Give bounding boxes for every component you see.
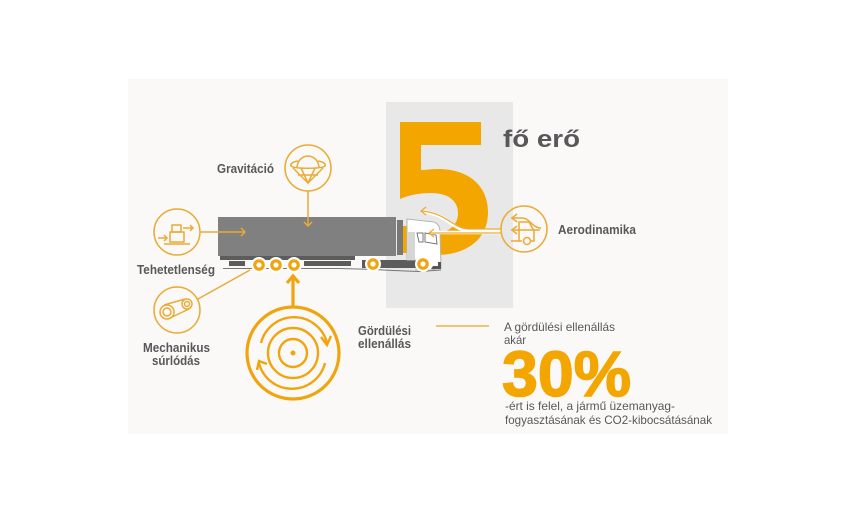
cab windows xyxy=(417,233,437,244)
arrow: gravity xyxy=(304,191,312,226)
label: Tehetetlenség: Tehetetlenség xyxy=(137,263,215,277)
callout: 30% text: A gördülési ellenállás xyxy=(504,320,615,334)
arrow: inertia xyxy=(200,228,245,236)
icon: aerodynamics xyxy=(501,206,547,252)
wheels xyxy=(251,256,431,273)
arrows: airflow xyxy=(421,207,501,237)
grey backdrop panel xyxy=(386,102,513,308)
label: Mechanikus súrlódás xyxy=(143,341,210,368)
callout: 30% text: -ért is felel, a jármű üzemanyag- xyxy=(505,399,675,413)
trailer body xyxy=(218,217,396,256)
heading: fő erő: fő erő xyxy=(503,126,580,153)
truck xyxy=(218,217,441,273)
callout: 30% text: akár xyxy=(504,333,526,347)
cab bumper xyxy=(431,262,441,269)
label: Gördülési ellenállás xyxy=(358,324,411,351)
cab connector xyxy=(397,220,407,255)
connector line xyxy=(436,325,489,327)
icon: mechanical friction belt xyxy=(154,287,200,333)
connector: mechanical friction xyxy=(198,270,250,299)
road line xyxy=(223,268,441,272)
label: Gördülési ellenállás: ellenállás xyxy=(358,337,411,351)
icon: rolling resistance wheel xyxy=(247,307,339,399)
arrow: rolling resistance xyxy=(287,276,299,307)
label: Aerodinamika: Aerodinamika xyxy=(558,223,637,237)
big number 5 xyxy=(400,122,488,255)
trailer skirts xyxy=(229,260,416,268)
callout: 30% text: fogyasztásának és CO2-kibocsátásának xyxy=(505,413,713,427)
callout: 30% text: 30% xyxy=(502,338,631,410)
callout: 30% text xyxy=(502,320,713,427)
label: Mechanikus súrlódás: súrlódás xyxy=(152,354,200,368)
trailer underside xyxy=(220,256,355,260)
cab side panel xyxy=(407,232,415,260)
cab xyxy=(407,219,441,270)
icon: gravity parachute xyxy=(285,145,331,191)
background panel xyxy=(128,79,728,434)
label: Mechanikus súrlódás: Mechanikus xyxy=(143,341,210,355)
label: Gördülési ellenállás: Gördülési xyxy=(358,324,411,338)
icon: inertia boxes xyxy=(154,209,200,255)
label: Gravitáció: Gravitáció xyxy=(217,162,274,176)
